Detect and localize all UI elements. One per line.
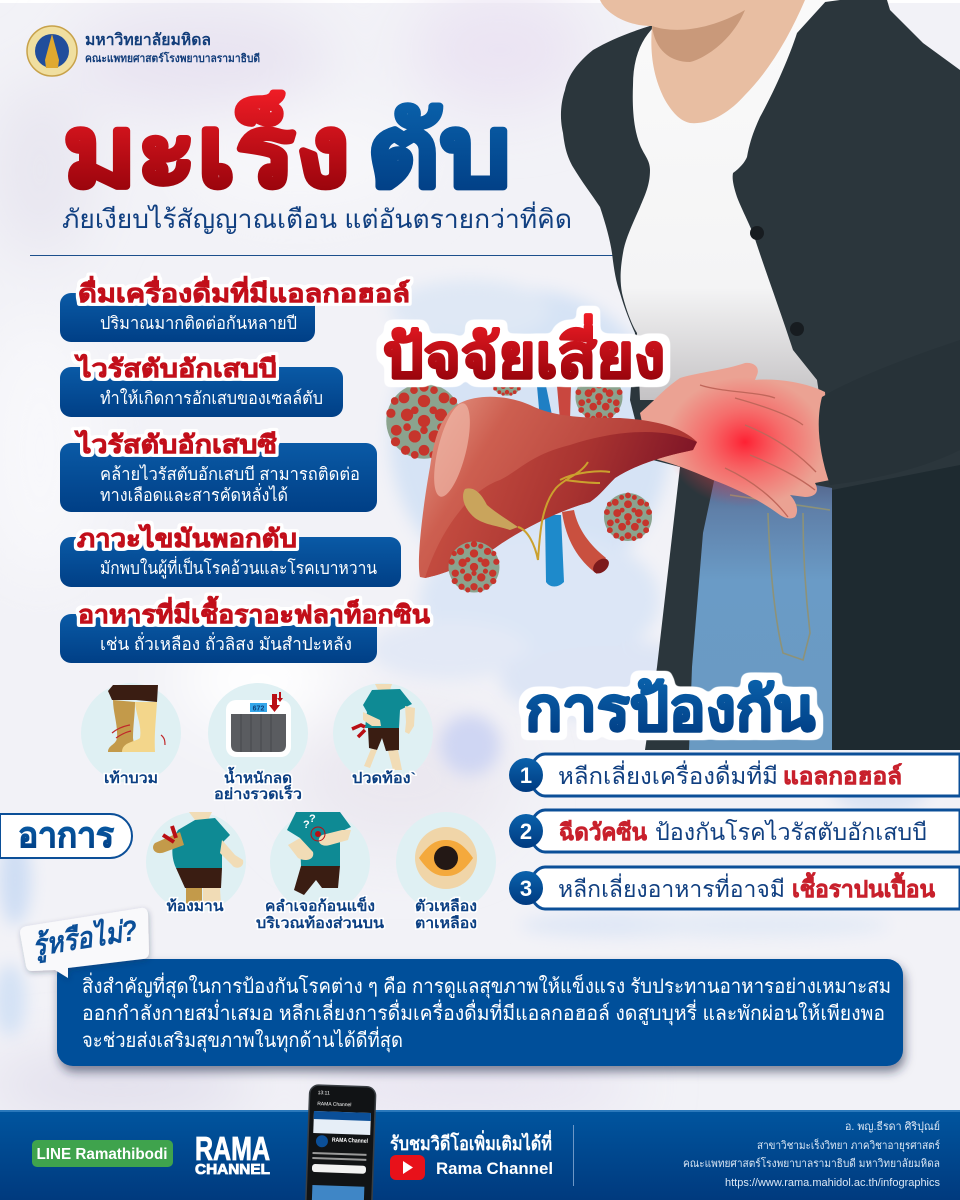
- dark cardigan: [561, 0, 960, 750]
- credits: https://www.rama.mahidol.ac.th/infographics: [725, 1177, 940, 1189]
- video call to action: รับชมวิดีโอเพิ่มเติมได้ที่: [390, 1130, 552, 1155]
- bile ducts: [518, 462, 610, 560]
- phone mockup: [306, 1085, 376, 1200]
- did you know text panel: ออกกำลังกายสม่ำเสมอ หลีกเลี่ยงการดื่มเครื่องดื่มที่มีแอลกอฮอล์ งดสูบบุหรี่ และพักผ่อนให้เพียงพอ: [82, 999, 885, 1026]
- prevention item 3: หลีกเลี่ยงอาหารที่อาจมี: [558, 873, 785, 902]
- symptom: hard lump in upper abdomen: ?: [309, 813, 316, 825]
- symptom: swollen feet: เท้าบวม: [104, 770, 158, 787]
- prevention item 3: [509, 867, 960, 909]
- credits: [683, 1120, 940, 1189]
- person holding abdomen: [561, 0, 960, 750]
- risk factor heading: ปัจจัยเสี่ยง: [383, 314, 665, 390]
- Rama Channel logo: CHANNEL: [195, 1161, 270, 1178]
- symptom: jaundice: ตาเหลือง: [415, 915, 477, 932]
- symptom: jaundice: [396, 812, 496, 932]
- credits: สาขาวิชามะเร็งวิทยา ภาควิชาอายุรศาสตร์: [757, 1138, 940, 1152]
- risk factor 4: [60, 523, 401, 587]
- blood vessels upper: [537, 386, 553, 420]
- prevention item 3: 3: [520, 876, 532, 901]
- risk factor 3: ทางเลือดและสารคัดหลั่งได้: [100, 483, 288, 505]
- neck shadow: [652, 10, 745, 62]
- risk factor 3: คล้ายไวรัสตับอักเสบบี สามารถติดต่อ: [100, 464, 360, 484]
- risk factor 2: ไวรัสตับอักเสบบี: [74, 353, 277, 383]
- jeans: [689, 467, 832, 750]
- symptom: jaundice: ตัวเหลือง: [415, 898, 477, 915]
- risk factor 2: ทำให้เกิดการอักเสบของเซลล์ตับ: [100, 388, 323, 408]
- liver body: [419, 397, 697, 578]
- prevention item 3: เชื้อราปนเปื้อน: [792, 872, 935, 902]
- Rama Channel logo: RAMA: [195, 1130, 270, 1167]
- symptom: hard lump in upper abdomen: คลำเจอก้อนแข็ง: [265, 896, 375, 915]
- risk factor 3: ไวรัสตับอักเสบซี: [74, 429, 277, 459]
- white t-shirt: [621, 0, 827, 400]
- symptom: rapid weight loss: 672: [253, 706, 264, 712]
- symptoms label: [0, 814, 132, 858]
- header rule: [30, 255, 620, 256]
- symptom: hard lump in upper abdomen: ?: [303, 819, 310, 831]
- viruses in front of the liver: [449, 493, 652, 592]
- symptom: hard lump in upper abdomen: บริเวณท้องส่วนบน: [256, 914, 385, 932]
- viruses behind the liver: [386, 364, 623, 459]
- footer band: [0, 1110, 960, 1200]
- prevention item 2: [509, 810, 960, 852]
- header logo: [27, 26, 77, 76]
- title: ตับ: [367, 96, 511, 208]
- decorative virus haze behind the liver: [0, 280, 930, 1036]
- title: [63, 91, 511, 208]
- organisation name: [85, 31, 260, 65]
- symptom: abdominal pain: [333, 683, 433, 787]
- did you know speech bubble: รู้หรือไม่?: [30, 913, 140, 965]
- right cardigan sleeve: [819, 340, 960, 485]
- symptom: swollen feet: [81, 683, 181, 787]
- phone mockup: RAMA Channel: [317, 1101, 352, 1108]
- credits: อ. พญ.ธีรดา ศิริปุณย์: [845, 1120, 940, 1133]
- finger lines: [700, 385, 816, 517]
- prevention item 2: ป้องกันโรคไวรัสตับอักเสบบี: [655, 819, 927, 845]
- prevention item 1: หลีกเลี่ยงเครื่องดื่มที่มี: [558, 760, 778, 789]
- did you know speech bubble: [20, 908, 149, 978]
- phone mockup: 13:11: [318, 1090, 330, 1097]
- prevention item 1: 1: [520, 763, 532, 788]
- symptom: bloating: ท้องมาน: [166, 898, 224, 915]
- prevention heading: การป้องกัน: [525, 676, 815, 743]
- blue vein: [545, 515, 564, 586]
- did you know text panel: สิ่งสำคัญที่สุดในการป้องกันโรคต่าง ๆ คือ การดูแลสุขภาพให้แข็งแรง รับประทานอาหารอย่างเหมาะสม: [82, 972, 891, 999]
- video call to action: [390, 1130, 553, 1180]
- symptom: abdominal pain: ปวดท้อง`: [352, 770, 416, 787]
- credits: คณะแพทยศาสตร์โรงพยาบาลรามาธิบดี มหาวิทยาลัยมหิดล: [683, 1156, 940, 1170]
- symptom: hard lump in upper abdomen: [256, 812, 385, 932]
- did you know text panel: จะช่วยส่งเสริมสุขภาพในทุกด้านได้ดีที่สุด: [82, 1026, 403, 1053]
- title: มะเร็ง: [63, 91, 350, 208]
- Rama Channel logo: [195, 1130, 270, 1178]
- risk factor 5: [60, 595, 430, 663]
- prevention item 2: ฉีดวัคซีน: [559, 819, 647, 845]
- LINE button: LINE Ramathibodi: [36, 1146, 168, 1163]
- risk factor 2: [60, 353, 343, 417]
- prevention item 1: [509, 754, 960, 796]
- prevention item 2: 2: [520, 819, 532, 844]
- jeans fly stitching: [730, 495, 830, 660]
- liver illustration with viruses: [386, 364, 697, 592]
- symptom: rapid weight loss: อย่างรวดเร็ว: [214, 784, 302, 803]
- symptom: rapid weight loss: น้ำหนักลด: [224, 766, 292, 787]
- risk factor 1: ปริมาณมากติดต่อกันหลายปี: [100, 313, 297, 333]
- video call to action: Rama Channel: [436, 1159, 553, 1178]
- organisation name: คณะแพทยศาสตร์โรงพยาบาลรามาธิบดี: [85, 51, 260, 65]
- skin: chin and neck: [600, 0, 805, 123]
- symptom: bloating: [146, 812, 246, 915]
- risk factor 1: ดื่มเครื่องดื่มที่มีแอลกอฮอล์: [78, 276, 410, 308]
- darker lower cardigan panel: [832, 465, 960, 750]
- risk factor 4: ภาวะไขมันพอกตับ: [77, 523, 297, 553]
- liver highlight: [427, 400, 477, 500]
- organisation name: มหาวิทยาลัยมหิดล: [85, 31, 211, 49]
- phone app banner: [313, 1111, 371, 1135]
- symptoms label: อาการ: [18, 816, 114, 855]
- cardigan buttons: [750, 226, 804, 336]
- risk factor 4: มักพบในผู้ที่เป็นโรคอ้วนและโรคเบาหวาน: [100, 556, 377, 579]
- phone mockup: RAMA Channel: [332, 1138, 368, 1145]
- icon: youtube: [390, 1155, 425, 1180]
- red artery: [562, 510, 606, 574]
- LINE button: [32, 1140, 173, 1167]
- risk factor 5: เช่น ถั่วเหลือง ถั่วลิสง มันสำปะหลัง: [100, 632, 352, 654]
- symptom: rapid weight loss: [208, 683, 308, 803]
- hand with red pain glow: [640, 363, 830, 518]
- risk factor 5: อาหารที่มีเชื้อราอะฟลาท็อกซิน: [78, 595, 430, 629]
- gallbladder: [463, 488, 518, 530]
- risk factor 3: [60, 429, 377, 512]
- subtitle: ภัยเงียบไร้สัญญาณเตือน แต่อันตรายกว่าที่คิด: [62, 201, 572, 234]
- did you know text panel: [57, 959, 903, 1066]
- risk factor 1: [60, 276, 410, 342]
- prevention item 1: แอลกอฮอล์: [783, 763, 902, 789]
- liver underside: [425, 432, 697, 578]
